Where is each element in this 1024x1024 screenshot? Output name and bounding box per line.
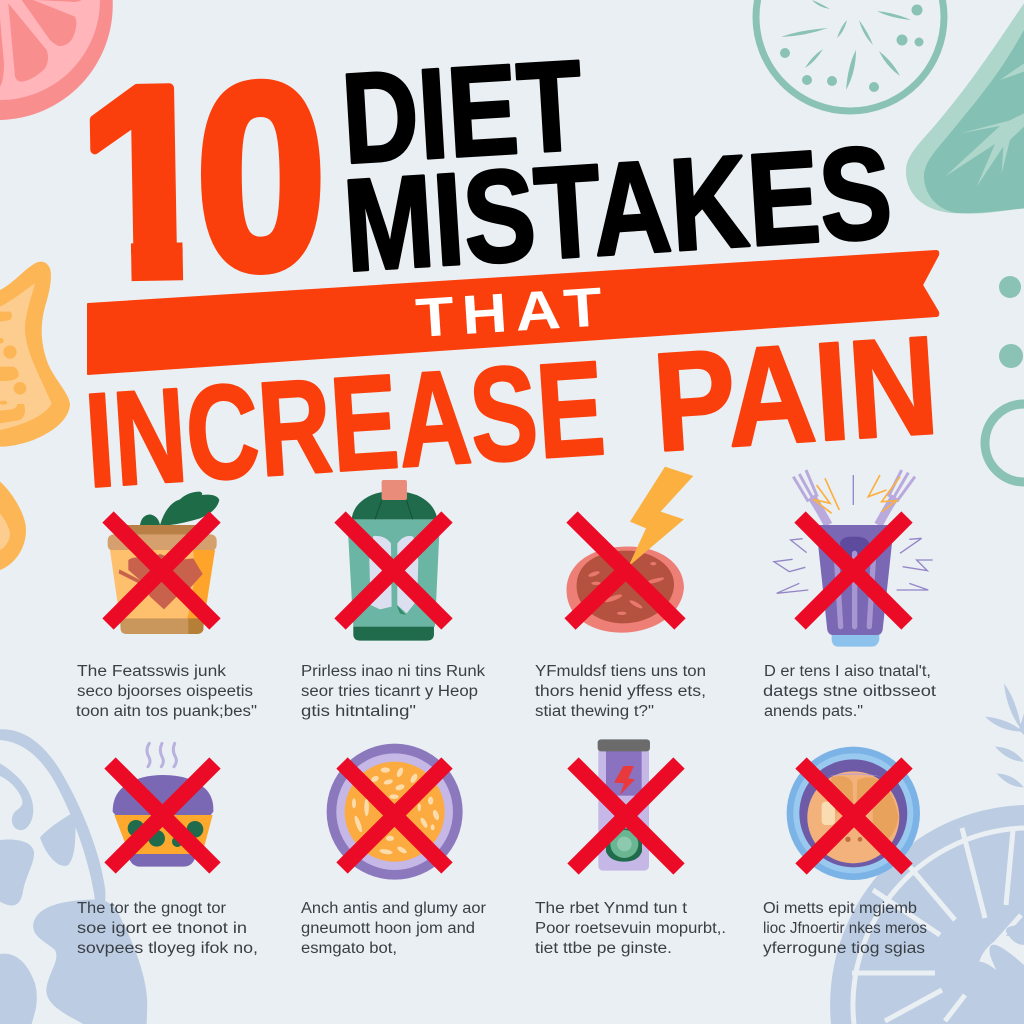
item 8: caption: Oi metts epit mgiemb <box>763 900 917 917</box>
decoration: green citrus ring top right <box>756 0 944 111</box>
title: 10: 1 <box>76 29 220 335</box>
item 2: caption: Prirless inao ni tins Runk <box>301 663 485 680</box>
item 5: steaming pot icon <box>113 743 213 867</box>
item 4: caption: D er tens I aiso tnatal't, <box>764 663 931 680</box>
decoration: blue shapes bottom left <box>0 729 147 1024</box>
item 1: caption: toon aitn tos puank;bes" <box>76 703 257 720</box>
item 6: caption: gneumott hoon jom and <box>301 920 475 937</box>
item 4: caption: dategs stne oitbsseot <box>763 683 937 700</box>
decoration: blue sprig far right <box>985 683 1024 787</box>
item 4: caption <box>763 663 937 720</box>
item 7: caption: tiet ttbe pe ginste. <box>535 940 672 957</box>
item 6: red cross <box>342 763 447 868</box>
item 8: caption <box>763 900 927 957</box>
item 6: caption: esmgato bot, <box>301 940 397 957</box>
decoration: yellow leaf left <box>0 262 70 447</box>
item 3: caption: YFmuldsf tiens uns ton <box>535 663 706 680</box>
decoration: blue citrus bottom right <box>830 805 1024 1024</box>
item 5: caption: soe igort ee tnonot in <box>77 920 247 937</box>
title: DIET: DIET <box>338 34 586 191</box>
item 2: caption: seor tries ticanrt y Heop <box>301 683 478 700</box>
decoration: pink citrus top left <box>0 0 113 120</box>
item 6: grain plate icon <box>327 744 463 880</box>
item 1: caption: seco bjoorses oispeetis <box>77 683 253 700</box>
item 5: red cross <box>110 763 215 868</box>
item 7: caption: Poor roetsevuin mopurbt,. <box>535 920 726 937</box>
item 5: caption <box>77 900 258 957</box>
title: INCREASE PAIN: INCREASE <box>81 334 609 516</box>
item 1: takeout bucket icon <box>108 492 219 634</box>
item 4: red cross <box>800 517 907 624</box>
item 4: caption: anends pats." <box>764 703 863 720</box>
item 1: caption <box>76 663 257 720</box>
title: 10 <box>90 78 321 282</box>
item 2: caption <box>301 663 485 720</box>
item 7: caption <box>535 900 726 957</box>
item 8: round dish icon <box>787 747 920 880</box>
item 2: red cross <box>340 517 447 624</box>
ribbon banner <box>88 251 938 374</box>
item 8: caption: lioc Jfnoertir nkes meros <box>763 920 927 937</box>
item 2: caption: gtis hitntaling" <box>301 703 416 720</box>
banner text: THAT: THAT <box>414 276 612 349</box>
decoration: small yellow leaf left <box>0 482 26 570</box>
title: INCREASE PAIN: PAIN <box>649 306 942 481</box>
item 2: bottle icon <box>347 480 440 641</box>
title: MISTAKES: MISTAKES <box>340 118 896 299</box>
item 8: caption: yferrogune tiog sgias <box>763 940 925 957</box>
item 5: caption: The tor the gnogt tor <box>77 900 226 917</box>
item 4: cup with forks icon <box>774 470 933 647</box>
item 3: caption: stiat thewing t?" <box>535 703 654 720</box>
item 3: caption <box>535 663 706 720</box>
item 6: caption <box>301 900 486 957</box>
title: 10: 0 <box>195 29 327 324</box>
item 7: energy drink icon <box>598 739 650 871</box>
item 3: caption: thors henid yffess ets, <box>535 683 706 700</box>
item 3: red cross (upper arm hidden) <box>570 517 680 624</box>
item 7: red cross <box>573 763 679 869</box>
item 1: caption: The Featsswis junk <box>77 663 226 680</box>
item 1: red cross <box>108 517 215 624</box>
item 3: inflamed plate with lightning bolt icon <box>567 467 693 633</box>
item 5: caption: sovpees tloyeg ifok no, <box>77 940 258 957</box>
item 8: red cross <box>801 763 907 869</box>
item 7: caption: The rbet Ynmd tun t <box>535 900 688 917</box>
decoration: green dots and ring right <box>985 276 1024 482</box>
item 6: caption: Anch antis and glumy aor <box>301 900 486 917</box>
decoration: green leaf right <box>906 3 1024 214</box>
